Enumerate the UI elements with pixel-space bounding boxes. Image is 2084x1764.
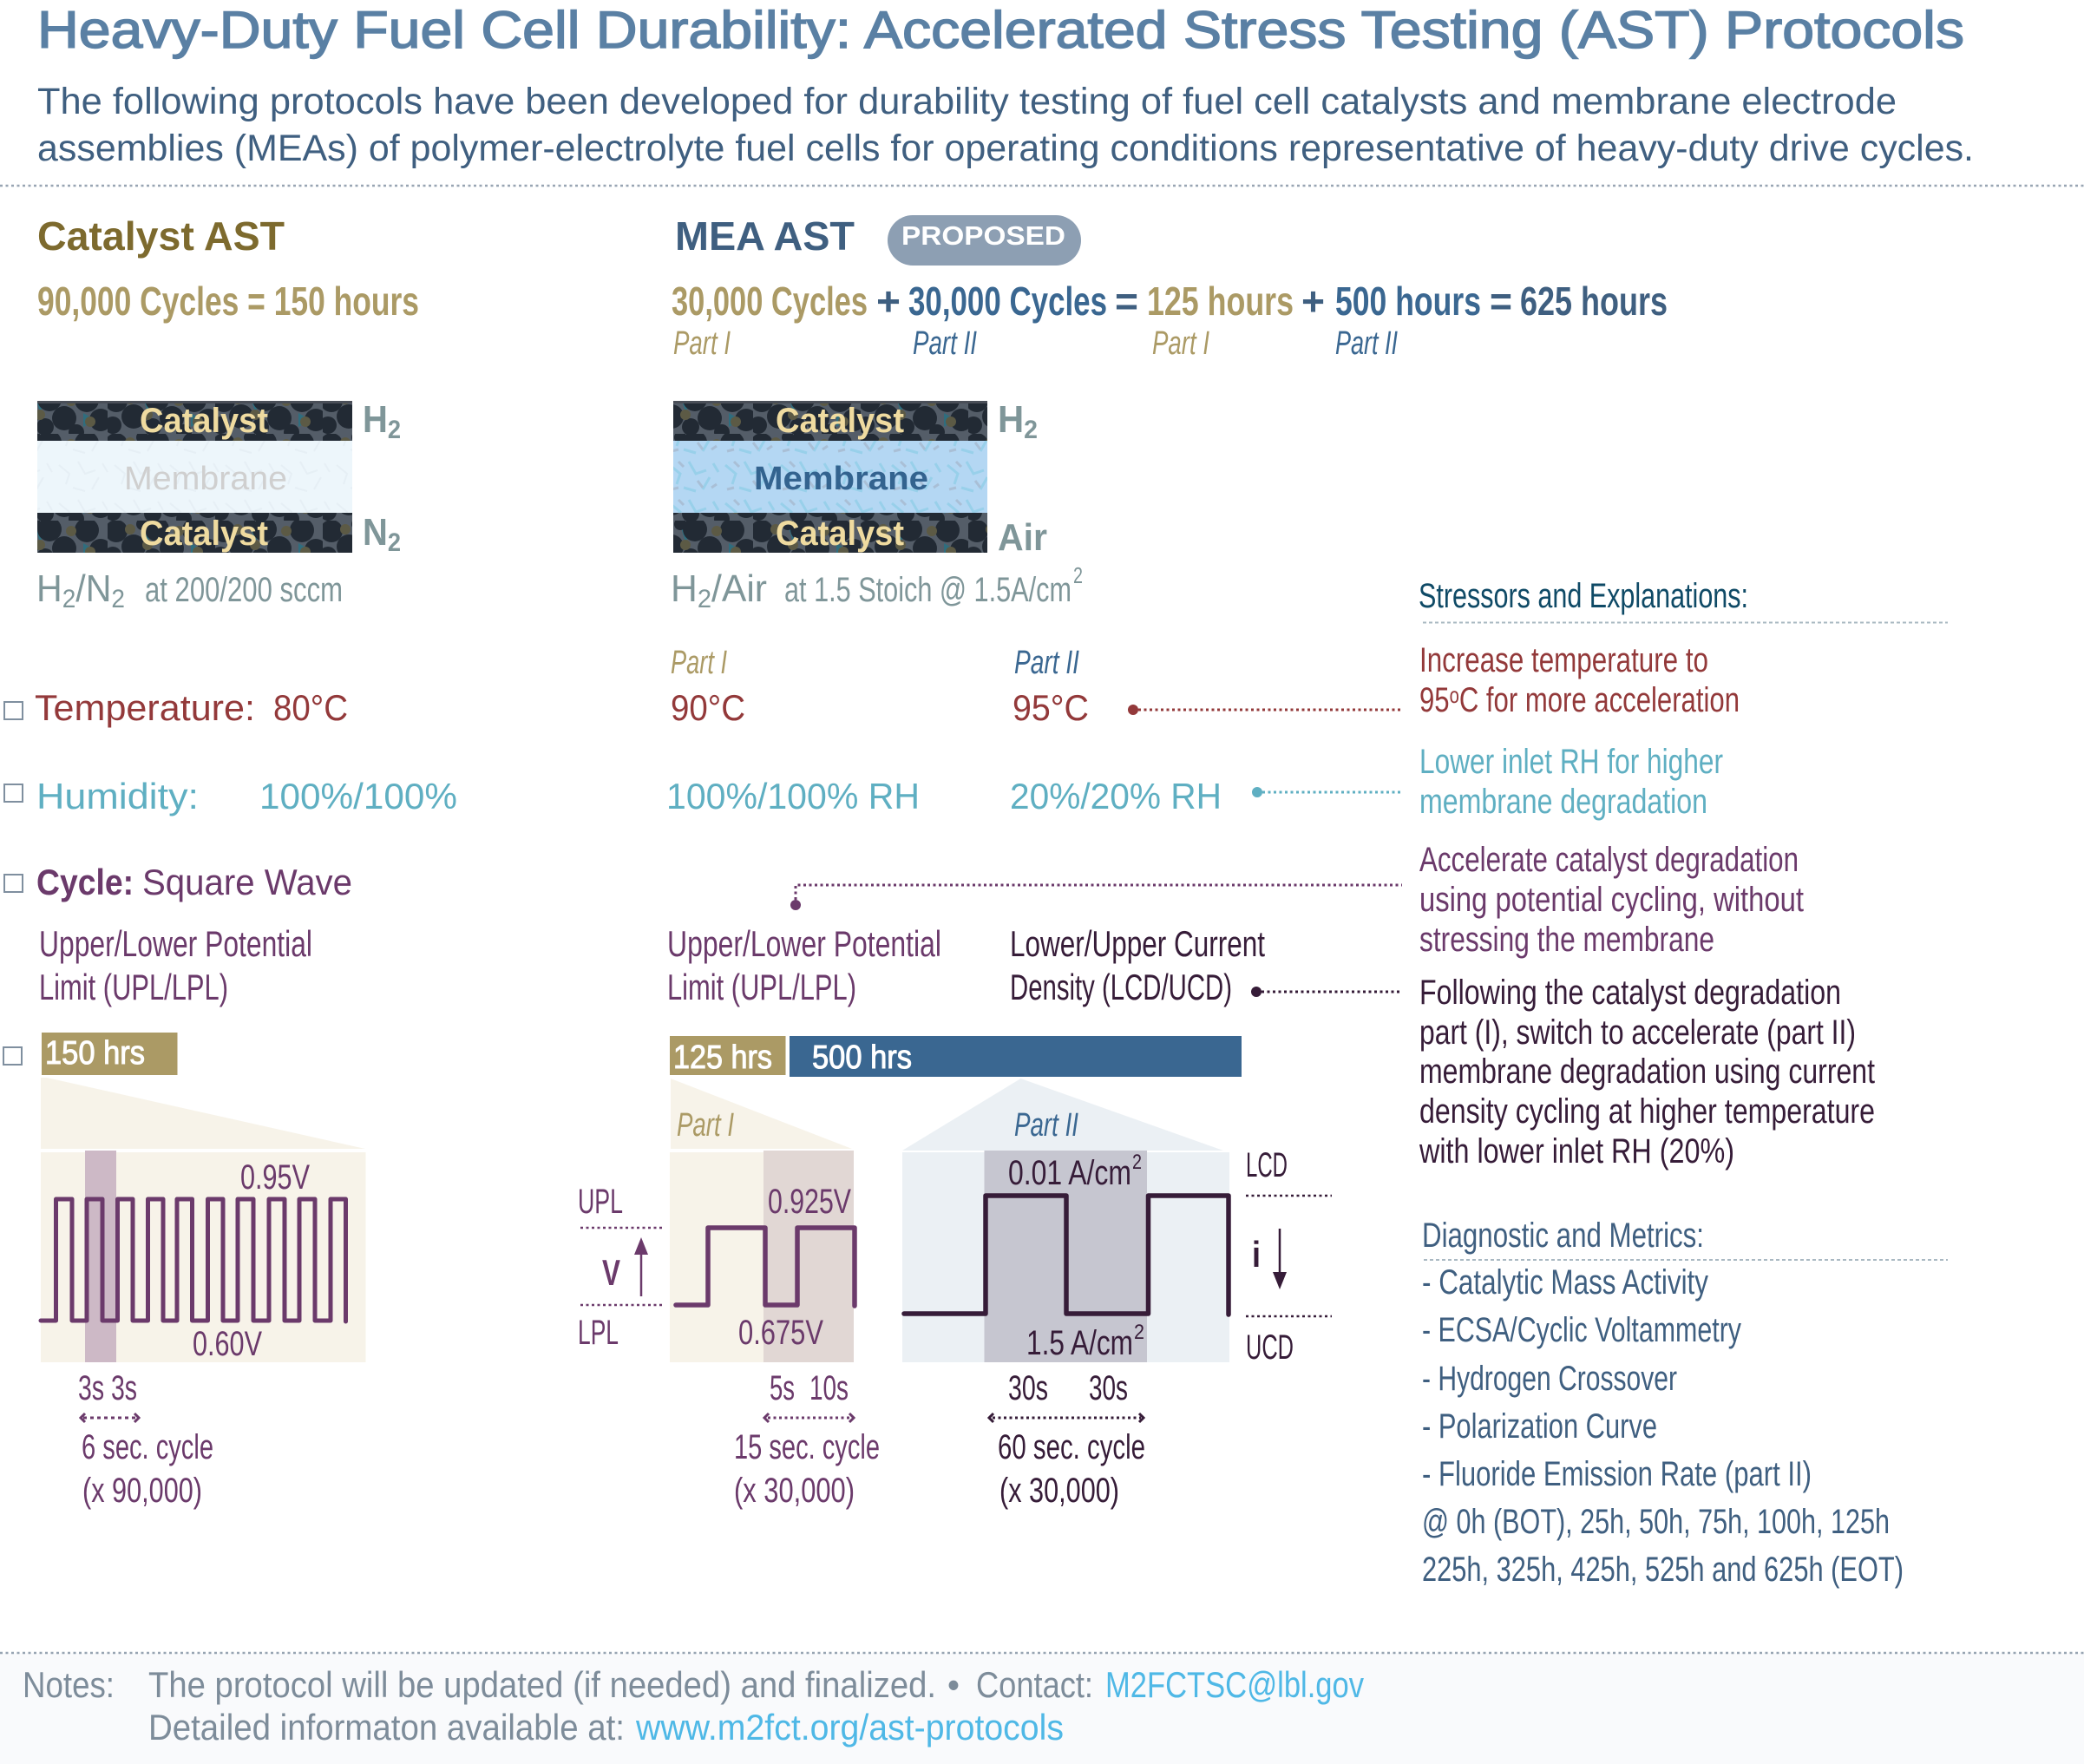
footer notes: The protocol will be updated (if needed) and finalized. [148, 1664, 936, 1705]
potential and current labels: Density (LCD/UCD) [1010, 967, 1232, 1007]
temperature row: 80°C [273, 687, 348, 728]
diagram: catalyst membrane stack: Catalyst [140, 515, 268, 553]
subtitle text block: The following protocols have been developed for durability testing of fuel cell catalysts and membrane electrode [37, 81, 1897, 122]
part labels [671, 645, 1079, 681]
cycle timing: 15 sec: 10s [809, 1369, 849, 1407]
diagram: MEA stack: Catalyst [776, 402, 904, 440]
explanation: membrane degradation: part (I), switch to accelerate (part II) [1419, 1013, 1856, 1052]
humidity values [666, 776, 1222, 816]
explanation: catalyst degradation: stressing the membrane [1419, 921, 1714, 959]
subtitle text block [37, 81, 1974, 169]
cycle timing: 15 sec: 15 sec. cycle [734, 1428, 880, 1466]
diagram: catalyst membrane stack: N [363, 511, 390, 554]
cycle timing: 60 sec: 30s [1008, 1369, 1048, 1407]
temperature values: 95°C [1013, 687, 1089, 728]
cycles and hours equation: + [876, 279, 901, 324]
footer notes: Notes: [23, 1664, 115, 1705]
explanation: temperature: o [1450, 682, 1459, 708]
potential limit label [39, 923, 312, 1007]
metrics list [1422, 1263, 1904, 1589]
explanation: catalyst degradation [1419, 841, 1804, 959]
cycle timing: 60 sec [989, 1369, 1145, 1510]
gas flow text: 2 [1073, 562, 1083, 588]
connector: current density [1251, 987, 1402, 997]
axis: LCD UCD current: i [1252, 1234, 1261, 1275]
explanation: membrane degradation [1419, 974, 1875, 1171]
temperature values: 90°C [671, 687, 745, 728]
cycle timing: 6 sec: 6 sec. cycle [82, 1428, 213, 1466]
time bar: 150 hrs [3, 1033, 177, 1075]
gas flow text [671, 562, 1083, 613]
chart: catalyst square wave [41, 1078, 366, 1363]
footer notes [0, 1653, 2084, 1764]
diagram: MEA stack: 2 [1024, 416, 1038, 444]
connector: humidity [1252, 787, 1402, 797]
cycles and hours equation: Part I [673, 325, 731, 362]
heading: diagnostics: Diagnostic and Metrics: [1422, 1216, 1704, 1255]
cycle timing: 15 sec: 5s [770, 1369, 795, 1407]
badge: proposed [888, 215, 1081, 266]
cycle timing: 60 sec: 60 sec. cycle [998, 1428, 1145, 1466]
cycle timing: 60 sec: 30s [1089, 1369, 1128, 1407]
explanation: humidity: membrane degradation [1419, 783, 1707, 821]
cycle row: Square Wave [142, 862, 352, 902]
gas flow text: H [671, 567, 698, 610]
metrics list: @ 0h (BOT), 25h, 50h, 75h, 100h, 125h [1422, 1503, 1890, 1541]
diagram: catalyst membrane stack: 2 [388, 416, 401, 444]
cycle timing: 6 sec: (x 90,000) [82, 1472, 202, 1510]
temperature row: Temperature: [35, 687, 255, 728]
humidity values: 20%/20% RH [1010, 776, 1222, 816]
diagram: MEA stack [673, 398, 1047, 559]
metrics list: - Polarization Curve [1422, 1407, 1657, 1446]
temperature values [671, 687, 1089, 728]
cycles and hours equation: 30,000 Cycles [908, 279, 1107, 324]
heading: catalyst AST: Catalyst AST [37, 213, 285, 259]
chart: part II current density square wave: 0.01 A/cm [1008, 1154, 1131, 1192]
cycle timing: 6 sec: 3s 3s [78, 1369, 137, 1407]
diagram: catalyst membrane stack: Catalyst [140, 402, 268, 440]
cycles and hours equation: Part I [1152, 325, 1209, 362]
metrics list: - Hydrogen Crossover [1422, 1360, 1677, 1398]
cycles and hours equation: 500 hours [1335, 279, 1481, 324]
axis: UPL LPL voltage: UPL [578, 1183, 623, 1221]
potential and current labels [667, 923, 1265, 1007]
panel: diagnostics and metrics [1422, 1216, 1948, 1589]
diagram: catalyst membrane stack [37, 398, 401, 557]
footer notes: Contact: [976, 1664, 1093, 1705]
axis: LCD UCD current [1246, 1146, 1332, 1367]
cycle timing: 15 sec: (x 30,000) [734, 1472, 855, 1510]
potential and current labels: Limit (UPL/LPL) [667, 967, 856, 1007]
explanation: catalyst degradation: using potential cycling, without [1419, 881, 1804, 919]
chart: part II current density square wave [902, 1079, 1229, 1362]
title: Heavy-Duty Fuel Cell Durability: Accelerated Stress Testing (AST) Protocols [37, 1, 1964, 59]
explanation: catalyst degradation: Accelerate catalyst degradation [1419, 841, 1799, 879]
diagram: catalyst membrane stack: 2 [388, 528, 401, 557]
cycles summary: 90,000 Cycles = 150 hours [37, 279, 419, 324]
gas flow text: at 200/200 sccm [145, 571, 343, 609]
temperature row [4, 687, 348, 728]
explanation: temperature: 95 [1419, 681, 1458, 719]
chart: part I voltage square wave: 0.675V [738, 1314, 823, 1352]
chart: part I voltage square wave: Part I [677, 1107, 734, 1144]
cycle timing: 6 sec [78, 1369, 213, 1510]
cycles and hours equation: Part II [913, 325, 977, 362]
panel: MEA AST [578, 213, 1668, 1510]
footer notes: Detailed informaton available at: [148, 1707, 625, 1748]
subtitle text block: assemblies (MEAs) of polymer-electrolyte fuel cells for operating conditions representative of heavy-duty drive cycles. [37, 128, 1974, 169]
panel: stressors and explanations [1419, 577, 1948, 1171]
axis: UPL LPL voltage [578, 1183, 665, 1352]
gas flow text: 2 [111, 585, 125, 613]
diagram: MEA stack: Catalyst [776, 515, 904, 553]
badge: proposed: PROPOSED [901, 220, 1065, 251]
footer notes: www.m2fct.org/ast-protocols [635, 1707, 1064, 1748]
potential and current labels: Lower/Upper Current [1010, 923, 1265, 964]
metrics list: 225h, 325h, 425h, 525h and 625h (EOT) [1422, 1551, 1904, 1589]
chart: part II current density square wave: 2 [1134, 1321, 1144, 1344]
explanation: humidity: Lower inlet RH for higher [1419, 743, 1723, 781]
metrics list: - Catalytic Mass Activity [1422, 1263, 1708, 1302]
gas flow text [36, 567, 343, 613]
explanation: temperature [1419, 641, 1740, 719]
heading: stressors: Stressors and Explanations: [1419, 577, 1748, 615]
explanation: temperature: C for more acceleration [1459, 681, 1740, 719]
cycles and hours equation: Part II [1335, 325, 1398, 362]
heading: MEA AST: MEA AST [675, 213, 855, 259]
cycles and hours equation: 125 hours [1147, 279, 1294, 324]
chart: catalyst square wave: 0.60V [193, 1325, 262, 1363]
axis: UPL LPL voltage: V [602, 1252, 620, 1293]
cycles and hours equation [672, 279, 1668, 362]
part labels: Part II [1014, 645, 1079, 681]
gas flow text: H [36, 567, 64, 610]
diagram: MEA stack: Membrane [754, 461, 928, 497]
time bar: 500 hrs: 500 hrs [812, 1039, 912, 1076]
cycles and hours equation: = [1490, 279, 1512, 324]
chart: part II current density square wave: 2 [1132, 1151, 1142, 1174]
cycle timing: 15 sec [734, 1369, 880, 1510]
diagram: MEA stack: H [998, 398, 1026, 441]
humidity row: Humidity: [36, 776, 199, 816]
cycle timing: 60 sec: (x 30,000) [999, 1472, 1119, 1510]
explanation: membrane degradation: with lower inlet RH (20%) [1419, 1132, 1734, 1171]
gas flow text: at 1.5 Stoich @ 1.5A/cm [784, 571, 1071, 609]
explanation: temperature: Increase temperature to [1419, 641, 1708, 679]
axis: LCD UCD current: UCD [1246, 1328, 1294, 1367]
humidity row: 100%/100% [259, 776, 457, 816]
cycle row: Cycle: [36, 862, 134, 902]
potential limit label: Limit (UPL/LPL) [39, 967, 228, 1007]
potential and current labels: Upper/Lower Potential [667, 923, 941, 964]
explanation: membrane degradation: density cycling at higher temperature [1419, 1092, 1875, 1131]
footer notes: • [947, 1664, 960, 1705]
chart: part II current density square wave: 1.5 A/cm [1026, 1324, 1133, 1362]
axis: LCD UCD current: LCD [1246, 1146, 1288, 1184]
humidity values: 100%/100% RH [666, 776, 920, 816]
chart: part I voltage square wave [670, 1079, 855, 1362]
footer notes: M2FCTSC@lbl.gov [1105, 1664, 1364, 1705]
gas flow text: /Air [711, 567, 767, 610]
part labels: Part I [671, 645, 727, 681]
cycle row [4, 862, 352, 902]
time bar: 125 hrs: 125 hrs [673, 1039, 772, 1076]
connector: cycle [790, 885, 1402, 910]
chart: part I voltage square wave: 0.925V [768, 1183, 851, 1221]
potential limit label: Upper/Lower Potential [39, 923, 312, 964]
diagram: catalyst membrane stack: H [363, 398, 390, 441]
axis: UPL LPL voltage: LPL [578, 1314, 619, 1352]
explanation: humidity [1419, 743, 1723, 821]
gas flow text: /N [75, 567, 111, 610]
chart: catalyst square wave: 0.95V [240, 1158, 310, 1197]
connector: temperature [1128, 705, 1402, 715]
panel: catalyst AST [3, 213, 457, 1510]
time bar: 500 hrs [790, 1036, 1242, 1077]
gas flow text: 2 [62, 585, 75, 613]
chart: part II current density square wave: Part II [1014, 1107, 1078, 1144]
explanation: membrane degradation: membrane degradation using current [1419, 1052, 1875, 1091]
cycles and hours equation: = [1115, 279, 1138, 324]
humidity row [4, 776, 457, 816]
metrics list: - Fluoride Emission Rate (part II) [1422, 1455, 1812, 1493]
cycles and hours equation: 30,000 Cycles [672, 279, 868, 324]
gas flow text: 2 [698, 585, 711, 613]
time bar: 150 hrs: 150 hrs [45, 1035, 145, 1072]
diagram: catalyst membrane stack: Membrane [124, 461, 287, 497]
metrics list: - ECSA/Cyclic Voltammetry [1422, 1311, 1741, 1349]
cycles and hours equation: 625 hours [1520, 279, 1668, 324]
cycles and hours equation: + [1301, 279, 1325, 324]
explanation: membrane degradation: Following the catalyst degradation [1419, 974, 1841, 1012]
diagram: MEA stack: Air [998, 516, 1047, 559]
